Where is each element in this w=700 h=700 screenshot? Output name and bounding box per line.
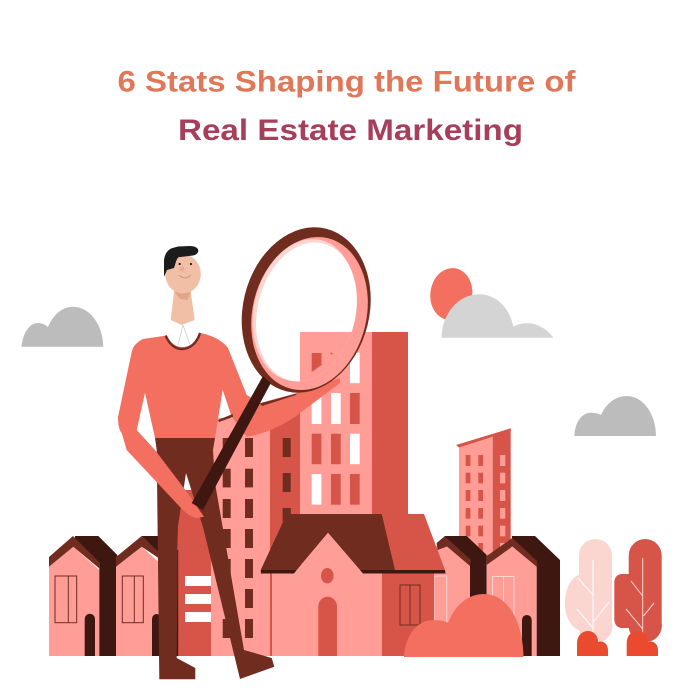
title: Real Estate Marketing [178,114,523,147]
head [165,254,201,294]
title [118,66,576,147]
bush [404,594,524,657]
sweater [118,333,340,518]
arm shadow [218,394,297,422]
central house [261,508,446,656]
hair [164,246,198,277]
infographic canvas [22,70,662,680]
collar [168,325,198,350]
man [118,214,387,679]
right small houses [434,536,560,656]
sweater neckline [166,333,200,349]
title: 6 Stats Shaping the Future of [118,66,576,98]
trousers [155,438,274,679]
left houses [49,536,178,656]
cloud: behind sun [442,294,553,338]
chin shadow [174,291,191,300]
cloud: left [22,307,103,347]
neck [171,292,195,325]
tree: red [614,539,662,656]
magnifier handle [192,376,271,510]
lens [242,227,371,393]
main tower [300,332,408,522]
tree: pale [565,539,612,656]
tall building behind man [211,413,301,656]
face [179,263,192,278]
cloud: right [574,396,656,436]
sun [427,265,476,323]
red building with white stripes [178,490,211,656]
small tower [456,428,511,560]
